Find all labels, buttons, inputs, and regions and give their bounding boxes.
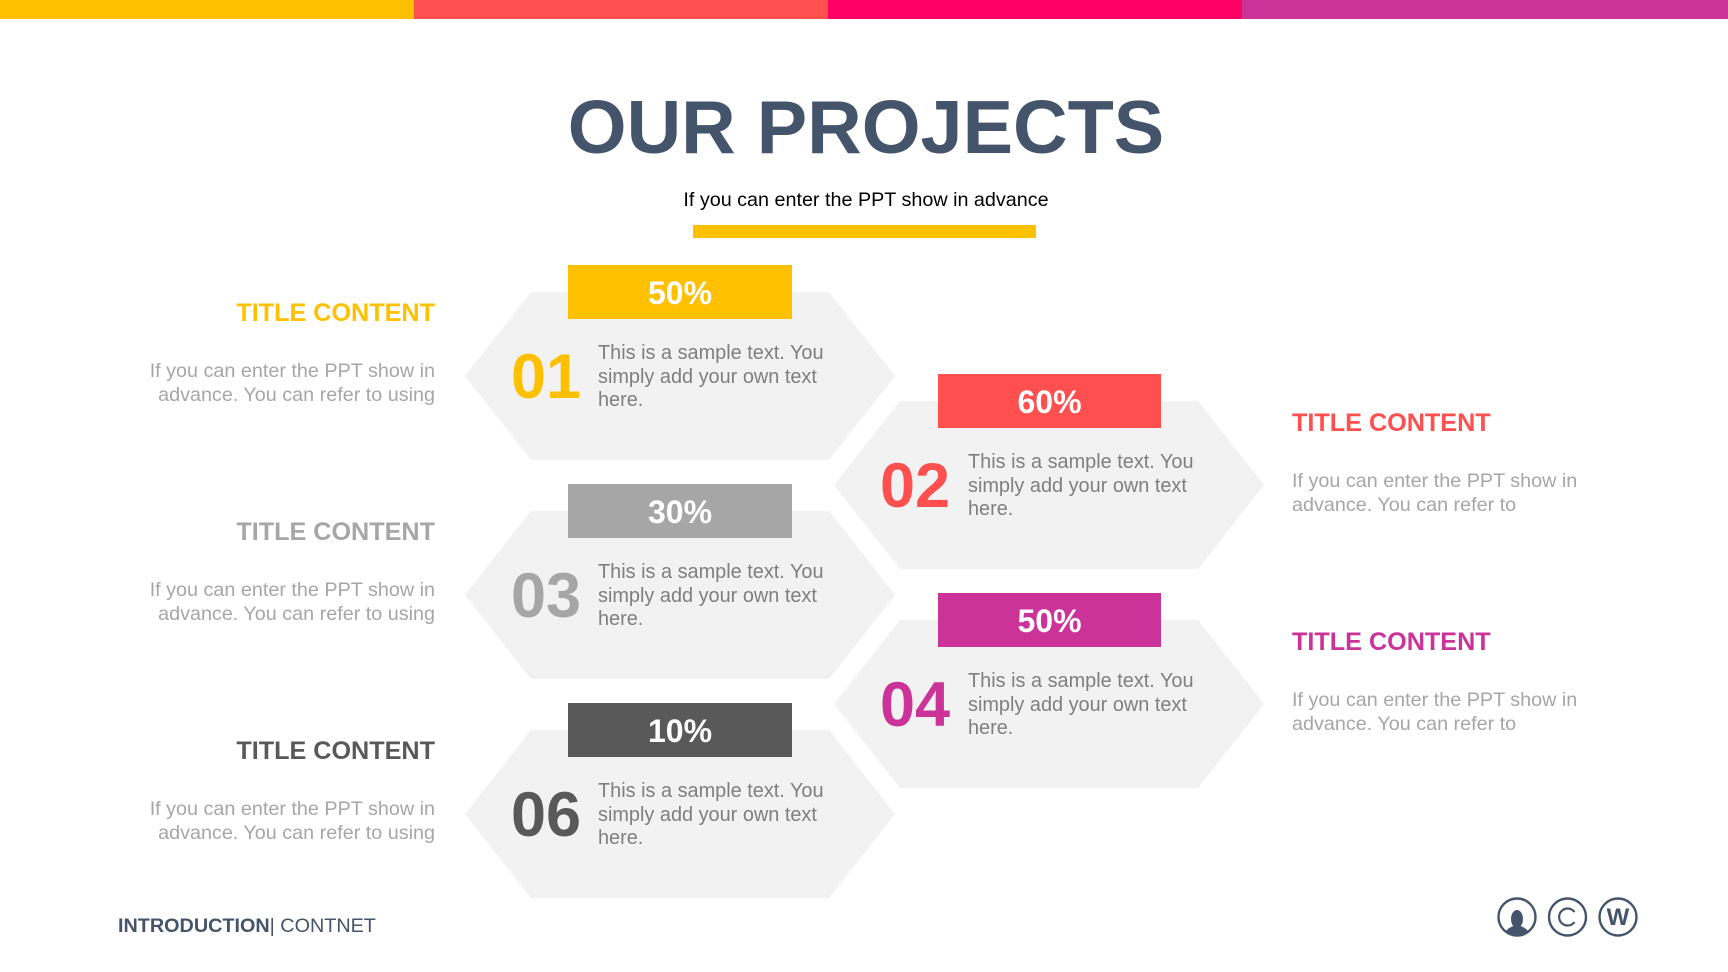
- percent tag 06: 10%: [648, 713, 712, 749]
- description: item 02: If you can enter the PPT show in: [1292, 470, 1577, 492]
- heading: item 02: TITLE CONTENT: [1292, 409, 1491, 437]
- hexagon 04: [834, 620, 1264, 788]
- icon: copyright: [1549, 898, 1586, 936]
- footer label: INTRODUCTION| CONTNET: [118, 915, 376, 937]
- title: OUR PROJECTS: [568, 86, 1164, 170]
- body text 06: here.: [598, 827, 643, 849]
- number 06: 06: [511, 780, 581, 850]
- body text 03: This is a sample text. You: [598, 561, 824, 583]
- hexagon 02: [834, 401, 1264, 569]
- description: item 03: [150, 579, 435, 625]
- number 01: 01: [511, 342, 581, 412]
- top colour bar: [0, 0, 1728, 19]
- description: item 02: advance. You can refer to: [1292, 494, 1516, 516]
- body text 03: here.: [598, 608, 643, 630]
- body text 01: here.: [598, 389, 643, 411]
- description: item 04: If you can enter the PPT show in: [1292, 689, 1577, 711]
- percent tag 02: 60%: [1017, 384, 1082, 420]
- subtitle: If you can enter the PPT show in advance: [683, 189, 1049, 211]
- heading: item 04: TITLE CONTENT: [1292, 628, 1491, 656]
- percent tag 03: 30%: [648, 494, 712, 530]
- panel: item 06: [466, 703, 894, 898]
- heading: item 03: TITLE CONTENT: [236, 518, 435, 546]
- hexagon 06: [465, 730, 895, 898]
- icon: person: [1498, 898, 1536, 936]
- description: item 01: If you can enter the PPT show in: [150, 360, 435, 382]
- body text 06: [598, 780, 824, 849]
- description: item 03: advance. You can refer to using: [158, 603, 435, 625]
- body text 02: here.: [968, 498, 1013, 520]
- percent tag 01: 50%: [648, 275, 712, 311]
- body text 02: This is a sample text. You: [968, 451, 1194, 473]
- description: item 06: [150, 798, 435, 844]
- hexagon 03: [465, 511, 895, 679]
- number 02: 02: [880, 451, 950, 521]
- percent tag 04: [938, 593, 1161, 647]
- description: item 04: advance. You can refer to: [1292, 713, 1516, 735]
- body text 01: This is a sample text. You: [598, 342, 824, 364]
- body text 06: This is a sample text. You: [598, 780, 824, 802]
- percent tag 06: [568, 703, 792, 757]
- body text 02: simply add your own text: [968, 475, 1187, 497]
- body text 03: [598, 561, 824, 630]
- percent tag 03: [568, 484, 792, 538]
- percent tag 04: 50%: [1017, 603, 1082, 639]
- panel: item 01: [466, 265, 894, 460]
- description: item 01: advance. You can refer to using: [158, 384, 435, 406]
- panel: item 02: [834, 374, 1264, 569]
- percent tag 02: [938, 374, 1161, 428]
- number 04: 04: [880, 670, 950, 740]
- panel: item 04: [834, 593, 1264, 788]
- body text 04: [968, 670, 1194, 739]
- body text 04: This is a sample text. You: [968, 670, 1194, 692]
- heading: item 06: TITLE CONTENT: [236, 737, 435, 765]
- heading: item 01: TITLE CONTENT: [236, 299, 435, 327]
- hexagon 01: [465, 292, 895, 460]
- panel: item 03: [466, 484, 894, 679]
- icon: W: W: [1607, 904, 1630, 931]
- number 03: 03: [511, 561, 581, 631]
- body text 01: simply add your own text: [598, 366, 817, 388]
- description: item 03: If you can enter the PPT show in: [150, 579, 435, 601]
- percent tag 01: [568, 265, 792, 319]
- body text 02: [968, 451, 1194, 520]
- description: item 06: If you can enter the PPT show in: [150, 798, 435, 820]
- description: item 02: [1292, 470, 1577, 516]
- body text 04: simply add your own text: [968, 694, 1187, 716]
- title underline: [693, 225, 1036, 238]
- body text 06: simply add your own text: [598, 804, 817, 826]
- body text 04: here.: [968, 717, 1013, 739]
- body text 03: simply add your own text: [598, 585, 817, 607]
- icon: W: [1600, 898, 1636, 936]
- description: item 04: [1292, 689, 1577, 735]
- body text 01: [598, 342, 824, 411]
- description: item 06: advance. You can refer to using: [158, 822, 435, 844]
- icons: social: [1497, 897, 1638, 937]
- description: item 01: [150, 360, 435, 406]
